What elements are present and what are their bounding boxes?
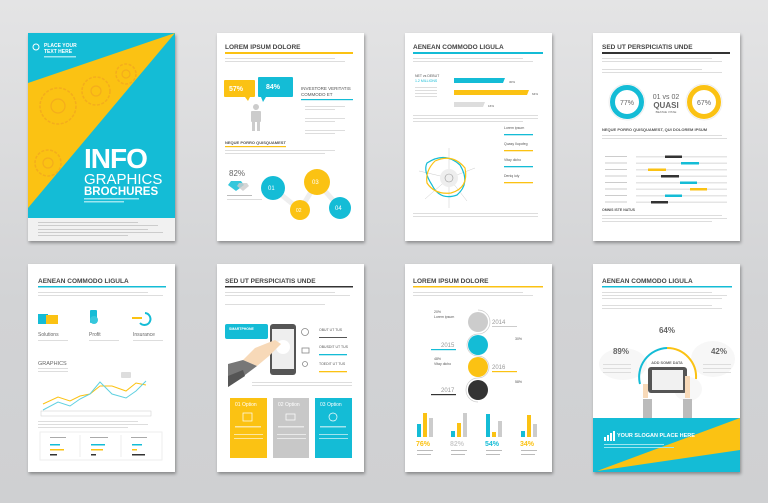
page 1: cover [28,33,175,241]
legend: Lorem ipsum [504,126,524,130]
step circles [261,169,351,220]
cover yellow triangle [28,33,175,208]
section heading [225,140,335,154]
option boxes [230,398,352,458]
bar chart [415,74,538,108]
vs text [653,94,679,114]
legend: Vitay dicho [504,158,521,162]
donut 77%: 77% [620,100,634,107]
timeline: 2014 [492,320,506,326]
title: LOREM IPSUM DOLORE [413,278,489,285]
world map shape [599,341,735,401]
line chart: GRAPHICS [38,361,67,367]
stats: 42% [711,347,727,356]
timeline: 2017 [441,388,455,394]
stats: 89% [613,347,629,356]
bar chart: 64% [532,92,538,96]
bar groups: 76% [416,441,431,448]
82% diamond [227,169,262,200]
vs text: QUASI [653,101,679,110]
bar chart: 1.2 MILLIONS [415,79,438,83]
right icon list [302,328,349,372]
page 6 [217,264,364,472]
page 4: NEQUE PORRO QUISQUAMEST, QUI DOLOREM IPSUM [602,127,708,132]
timeline: Vitay dicho [434,362,451,366]
legend: Deniq iuly [504,174,520,178]
person icon [251,104,261,131]
legend: Quasy Ilupofeg [504,142,528,146]
cover header text [33,43,77,58]
title: SED UT PERSPICIATIS UNDE [225,278,316,285]
legend [504,126,533,183]
bubble 84% [258,77,293,102]
right icon list: OBUT UT TUS [319,328,343,332]
step circles: 01 [268,186,275,192]
timeline [431,310,522,402]
slogan band [593,418,740,472]
timeline: Lorem ipsum [434,315,454,319]
stats [613,326,727,356]
title: AENEAN COMMODO LIGULA [413,44,504,51]
bar groups: 54% [485,441,500,448]
cover header text: PLACE YOUR [44,43,77,49]
bar groups: 34% [520,441,535,448]
step circles: 03 [312,180,319,186]
cover title: INFO [84,143,147,174]
vs text: BEATAE VITAE [656,110,676,114]
bubble 57% [224,80,255,101]
cyan label box [225,324,268,339]
cover title [84,143,162,202]
timeline: 20% [434,310,441,314]
donut 67% [686,84,722,120]
title: SED UT PERSPICIATIS UNDE [602,44,693,51]
bubble 84%: 84% [266,84,281,91]
icon insurance: Insurance [133,332,155,338]
bar chart: 30% [509,80,515,84]
radar chart [419,148,475,208]
arc and tablet [639,348,696,419]
icon profit [89,310,101,338]
donut 67%: 67% [697,100,711,107]
icon solutions: Solutions [38,332,59,338]
page 7 [405,264,552,472]
vs text: 01 vs 02 [653,94,679,101]
title: AENEAN COMMODO LIGULA [602,278,693,285]
investore block: COMMODO ET [301,92,333,97]
timeline: 2015 [441,343,455,349]
page 8 [593,264,740,472]
icon insurance [132,313,155,338]
option boxes: 01 Option [235,402,257,408]
right icon list: OBUSDIT UT TUS [319,345,349,349]
timeline: 2016 [492,365,506,371]
timeline: 30% [515,337,522,341]
bar chart: NET vs DEBUT [415,74,440,78]
investore block: INVESTORE VERITATIS [301,86,351,91]
phone with hand [228,324,296,387]
investore block [301,86,353,134]
donut 77% [609,84,645,120]
cover header text: TEXT HERE [44,49,73,55]
bar groups: 82% [450,441,465,448]
page 4: OMNIS ISTE NATUS [602,208,636,212]
timeline: 48% [434,357,441,361]
bottom table [40,432,162,460]
icon solutions [38,314,59,338]
section heading: NEQUE PORRO QUISQUAMEST [225,140,286,145]
arc and tablet: ADD SOME DATA [651,361,683,365]
stats: 64% [659,326,675,335]
bar groups [416,413,537,455]
option boxes: 02 Option [278,402,300,408]
page 3 [405,33,552,241]
step circles: 04 [335,206,342,212]
option boxes: 03 Option [320,402,342,408]
bar chart: 16% [488,104,494,108]
page 4 [593,33,740,241]
title: LOREM IPSUM DOLORE [225,44,301,51]
cover title: GRAPHICS [84,171,162,188]
page 2 [217,33,364,241]
step circles: 02 [296,208,302,214]
bubble 57%: 57% [229,86,244,93]
title: AENEAN COMMODO LIGULA [38,278,129,285]
line chart [38,361,151,416]
82% diamond: 82% [229,169,245,178]
icon profit: Profit [89,332,101,338]
page 5 [28,264,175,472]
timeline: 58% [515,380,522,384]
slogan band: YOUR SLOGAN PLACE HERE [617,433,695,439]
range bars [605,156,727,204]
cover title: BROCHURES [84,186,158,198]
cyan label box: SMARTPHONE [229,327,255,331]
right icon list: TOEDIT UT TUS [319,362,346,366]
